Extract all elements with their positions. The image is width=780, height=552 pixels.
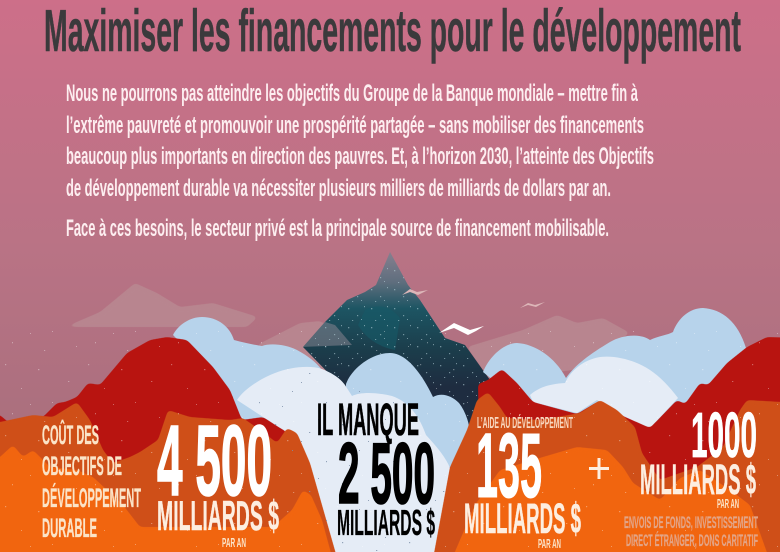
text: MILLIARDS $	[464, 495, 581, 543]
faint distant mountains	[65, 283, 630, 380]
figure: 4 500 milliards	[157, 405, 279, 550]
text: L’AIDE AU DÉVELOPPEMENT	[477, 413, 573, 432]
text: IL MANQUE	[317, 394, 419, 445]
figure: 1000 milliards	[640, 399, 757, 511]
intro text block	[66, 80, 654, 242]
light blue clouds left	[173, 317, 345, 430]
icon: small bird right	[520, 302, 545, 308]
label: coût des ODD: OBJECTIFS DE	[42, 451, 122, 481]
central dark mountain	[303, 252, 490, 426]
label: coût des ODD: DURABLE	[42, 513, 97, 543]
figure: il manque 2 500 milliards	[317, 394, 435, 543]
label: coût des ODD	[42, 419, 141, 543]
text: MILLIARDS $	[157, 492, 279, 539]
dark orange ridge right	[430, 392, 780, 552]
label: coût des ODD: COÛT DES	[42, 419, 99, 450]
dark orange ridge left	[0, 402, 342, 552]
figure: aide au développement 135 milliards: 135	[476, 415, 542, 517]
text: DÉVELOPPEMENT	[42, 482, 141, 513]
red mountain right	[478, 337, 780, 500]
text: MILLIARDS $	[337, 502, 435, 543]
figure: aide au développement 135 milliards	[464, 413, 581, 551]
light blue clouds right	[483, 308, 746, 430]
figure: aide au développement 135 milliards: PAR AN	[538, 536, 561, 551]
red mountain left	[0, 337, 287, 480]
paper grain overlay	[0, 320, 780, 552]
text: 2 500	[338, 426, 435, 522]
bright orange foreground left	[0, 445, 337, 552]
pale white cloud centre valley	[237, 367, 450, 552]
figure: 4 500 milliards: PAR AN	[222, 535, 246, 550]
pale white cloud right	[530, 357, 678, 428]
caption: sources privées	[624, 513, 758, 550]
bright orange foreground right	[445, 447, 775, 552]
plus sign	[589, 458, 609, 479]
icon: large white bird	[439, 323, 484, 335]
light blue clouds centre	[346, 353, 470, 480]
icon: small bird near summit	[402, 289, 428, 295]
figure: 1000 milliards: PAR AN	[717, 496, 739, 511]
text: 4 500	[157, 405, 272, 517]
